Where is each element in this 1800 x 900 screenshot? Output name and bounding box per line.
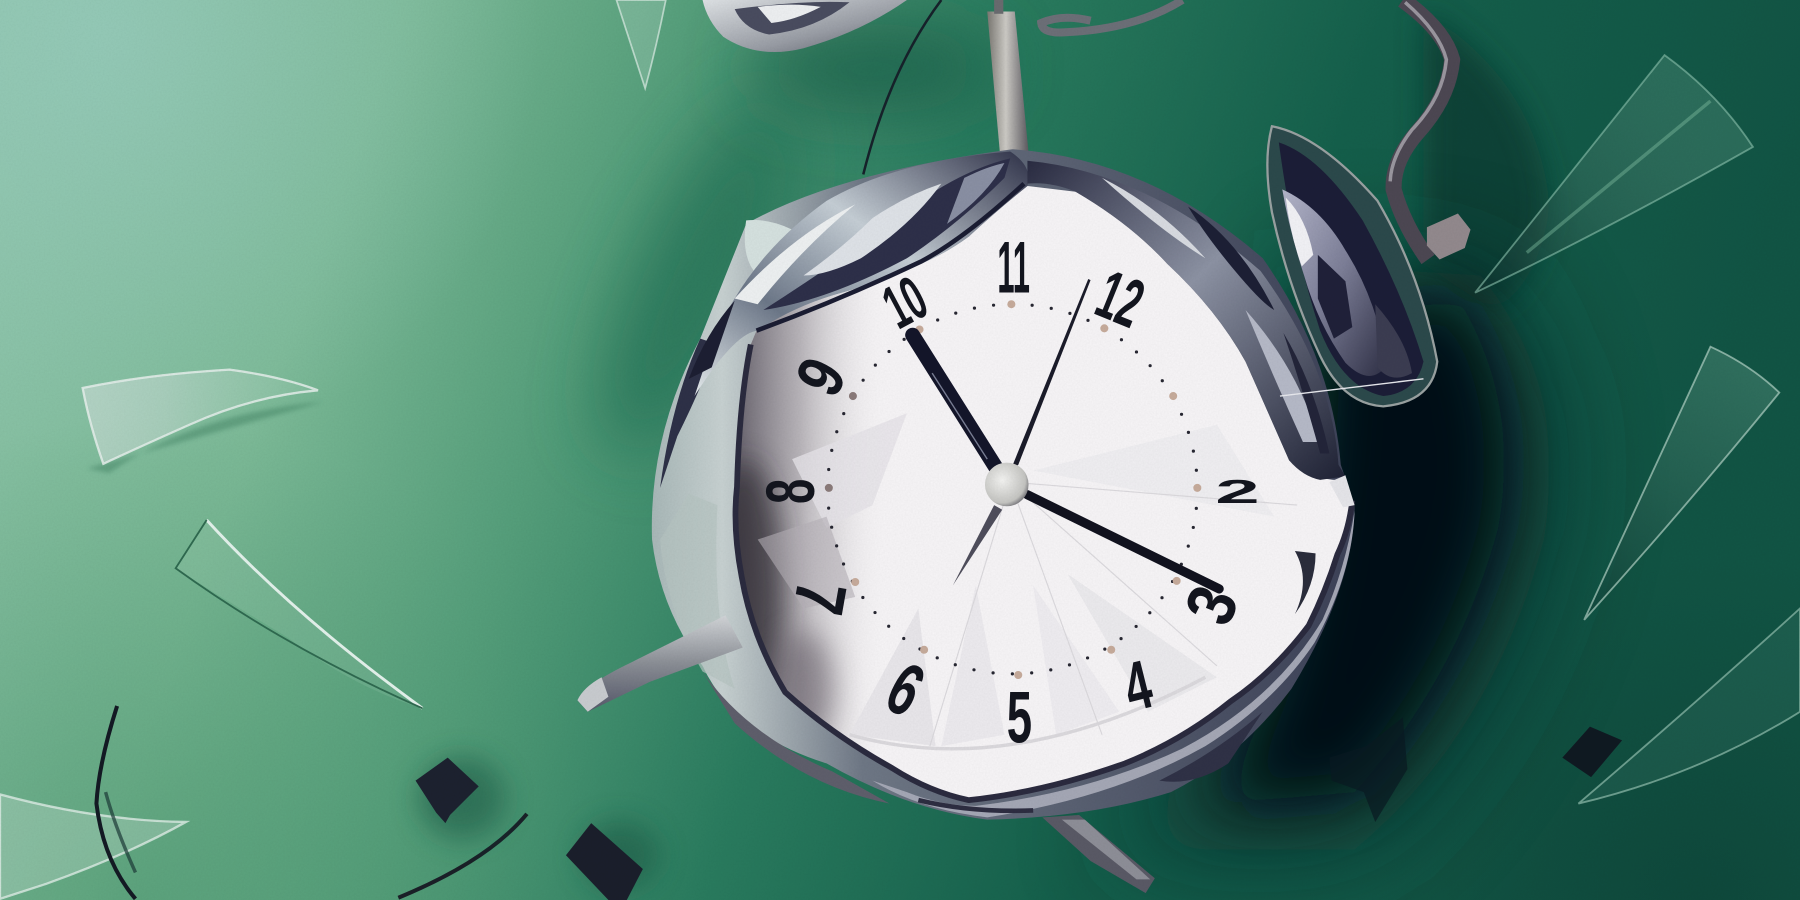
dial numerals: 5	[1007, 677, 1032, 758]
glass shard: left middle triangular	[176, 520, 422, 708]
clock hands	[913, 279, 1219, 589]
right chrome bezel band	[1027, 161, 1423, 480]
dial numerals: 12	[1086, 255, 1154, 343]
dial numerals: 7	[778, 575, 862, 620]
component: small black chip	[416, 757, 505, 839]
top hook	[1041, 0, 1182, 33]
dial numerals: 3	[1169, 575, 1254, 635]
dial numerals: 4	[1116, 646, 1160, 727]
thin black wire at top	[863, 0, 941, 174]
glass shard: left upper curved	[83, 370, 324, 473]
minute track: ring of dots	[828, 304, 1197, 674]
folded top-left bezel	[689, 152, 1029, 396]
glass shard: top centre	[616, 0, 666, 88]
wire: bottom centre black cable	[398, 814, 527, 898]
glass shard: right bottom	[1578, 608, 1800, 804]
handle wire at top right	[1390, 0, 1452, 259]
clock body: outer chrome case	[652, 149, 1355, 820]
hour markers: tan dots	[825, 300, 1201, 679]
nut on handle	[1427, 214, 1471, 259]
clock face: white dial	[738, 186, 1349, 798]
top stem pin	[987, 0, 1029, 153]
right bell	[1267, 126, 1437, 406]
wire: bottom-left black cable	[96, 706, 135, 899]
dial numerals	[753, 226, 1260, 758]
top chrome bell fragment	[703, 0, 907, 52]
bottom foot pin	[1042, 815, 1155, 893]
component: black connector	[566, 821, 659, 900]
component: dark pieces at lower right	[1329, 717, 1622, 822]
glass shard: right top large	[1475, 55, 1753, 293]
dial numerals: 10	[872, 263, 938, 342]
dial numerals: 8	[753, 479, 829, 504]
dial numerals: 9	[780, 346, 861, 407]
bottom and right chrome rim	[735, 344, 1355, 817]
glass shard: right middle	[1584, 347, 1779, 620]
left side pin	[577, 615, 743, 712]
dial numerals: 11	[997, 226, 1030, 308]
glass shard: bottom-left corner	[0, 794, 186, 899]
dial numerals: 6	[873, 647, 936, 733]
dial numerals: 2	[1215, 473, 1260, 510]
